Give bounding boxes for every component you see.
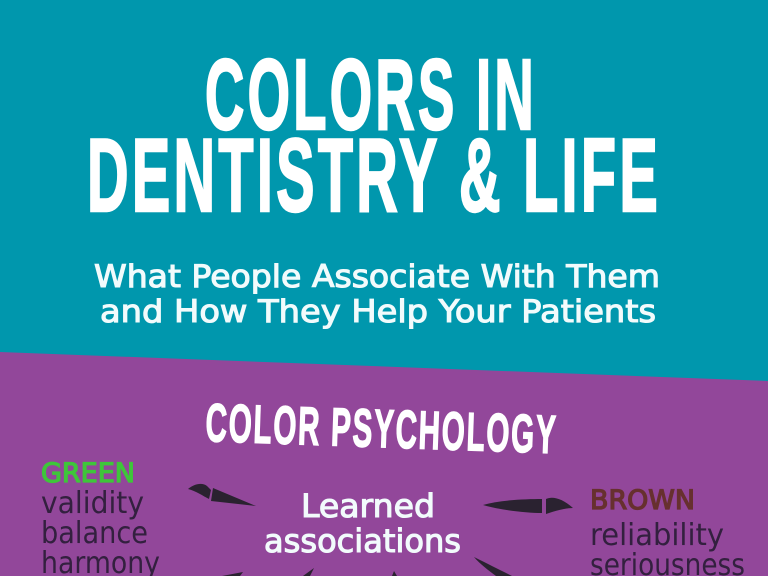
icon: brush arrow to brown [483, 498, 573, 514]
text block: green associations: validity [41, 486, 144, 521]
text block: learned associations [264, 487, 461, 560]
text block: green associations: GREEN [41, 458, 135, 489]
text block: learned associations: associations [264, 522, 461, 560]
text block: learned associations: Learned [301, 487, 435, 525]
icon: brush arrow bottom left [222, 572, 243, 576]
text block: brown associations: BROWN [590, 485, 695, 516]
panel: teal header background [0, 0, 768, 385]
icon: brush arrow lower right [474, 557, 512, 576]
icon: brush arrow to green [188, 484, 256, 506]
text block: green associations: balance [41, 516, 148, 551]
icon: brush arrow lower centre [392, 571, 397, 576]
text block: green associations [41, 458, 160, 576]
text block: brown associations [590, 485, 745, 576]
title [87, 39, 661, 234]
panel: purple color psychology background [0, 352, 768, 576]
icon: brush arrow bottom centre-left [303, 568, 314, 576]
subtitle: What People Associate With Them [94, 259, 660, 295]
subtitle: and How They Help Your Patients [100, 294, 656, 330]
subtitle [94, 259, 660, 330]
text block: brown associations: reliability [590, 518, 724, 553]
